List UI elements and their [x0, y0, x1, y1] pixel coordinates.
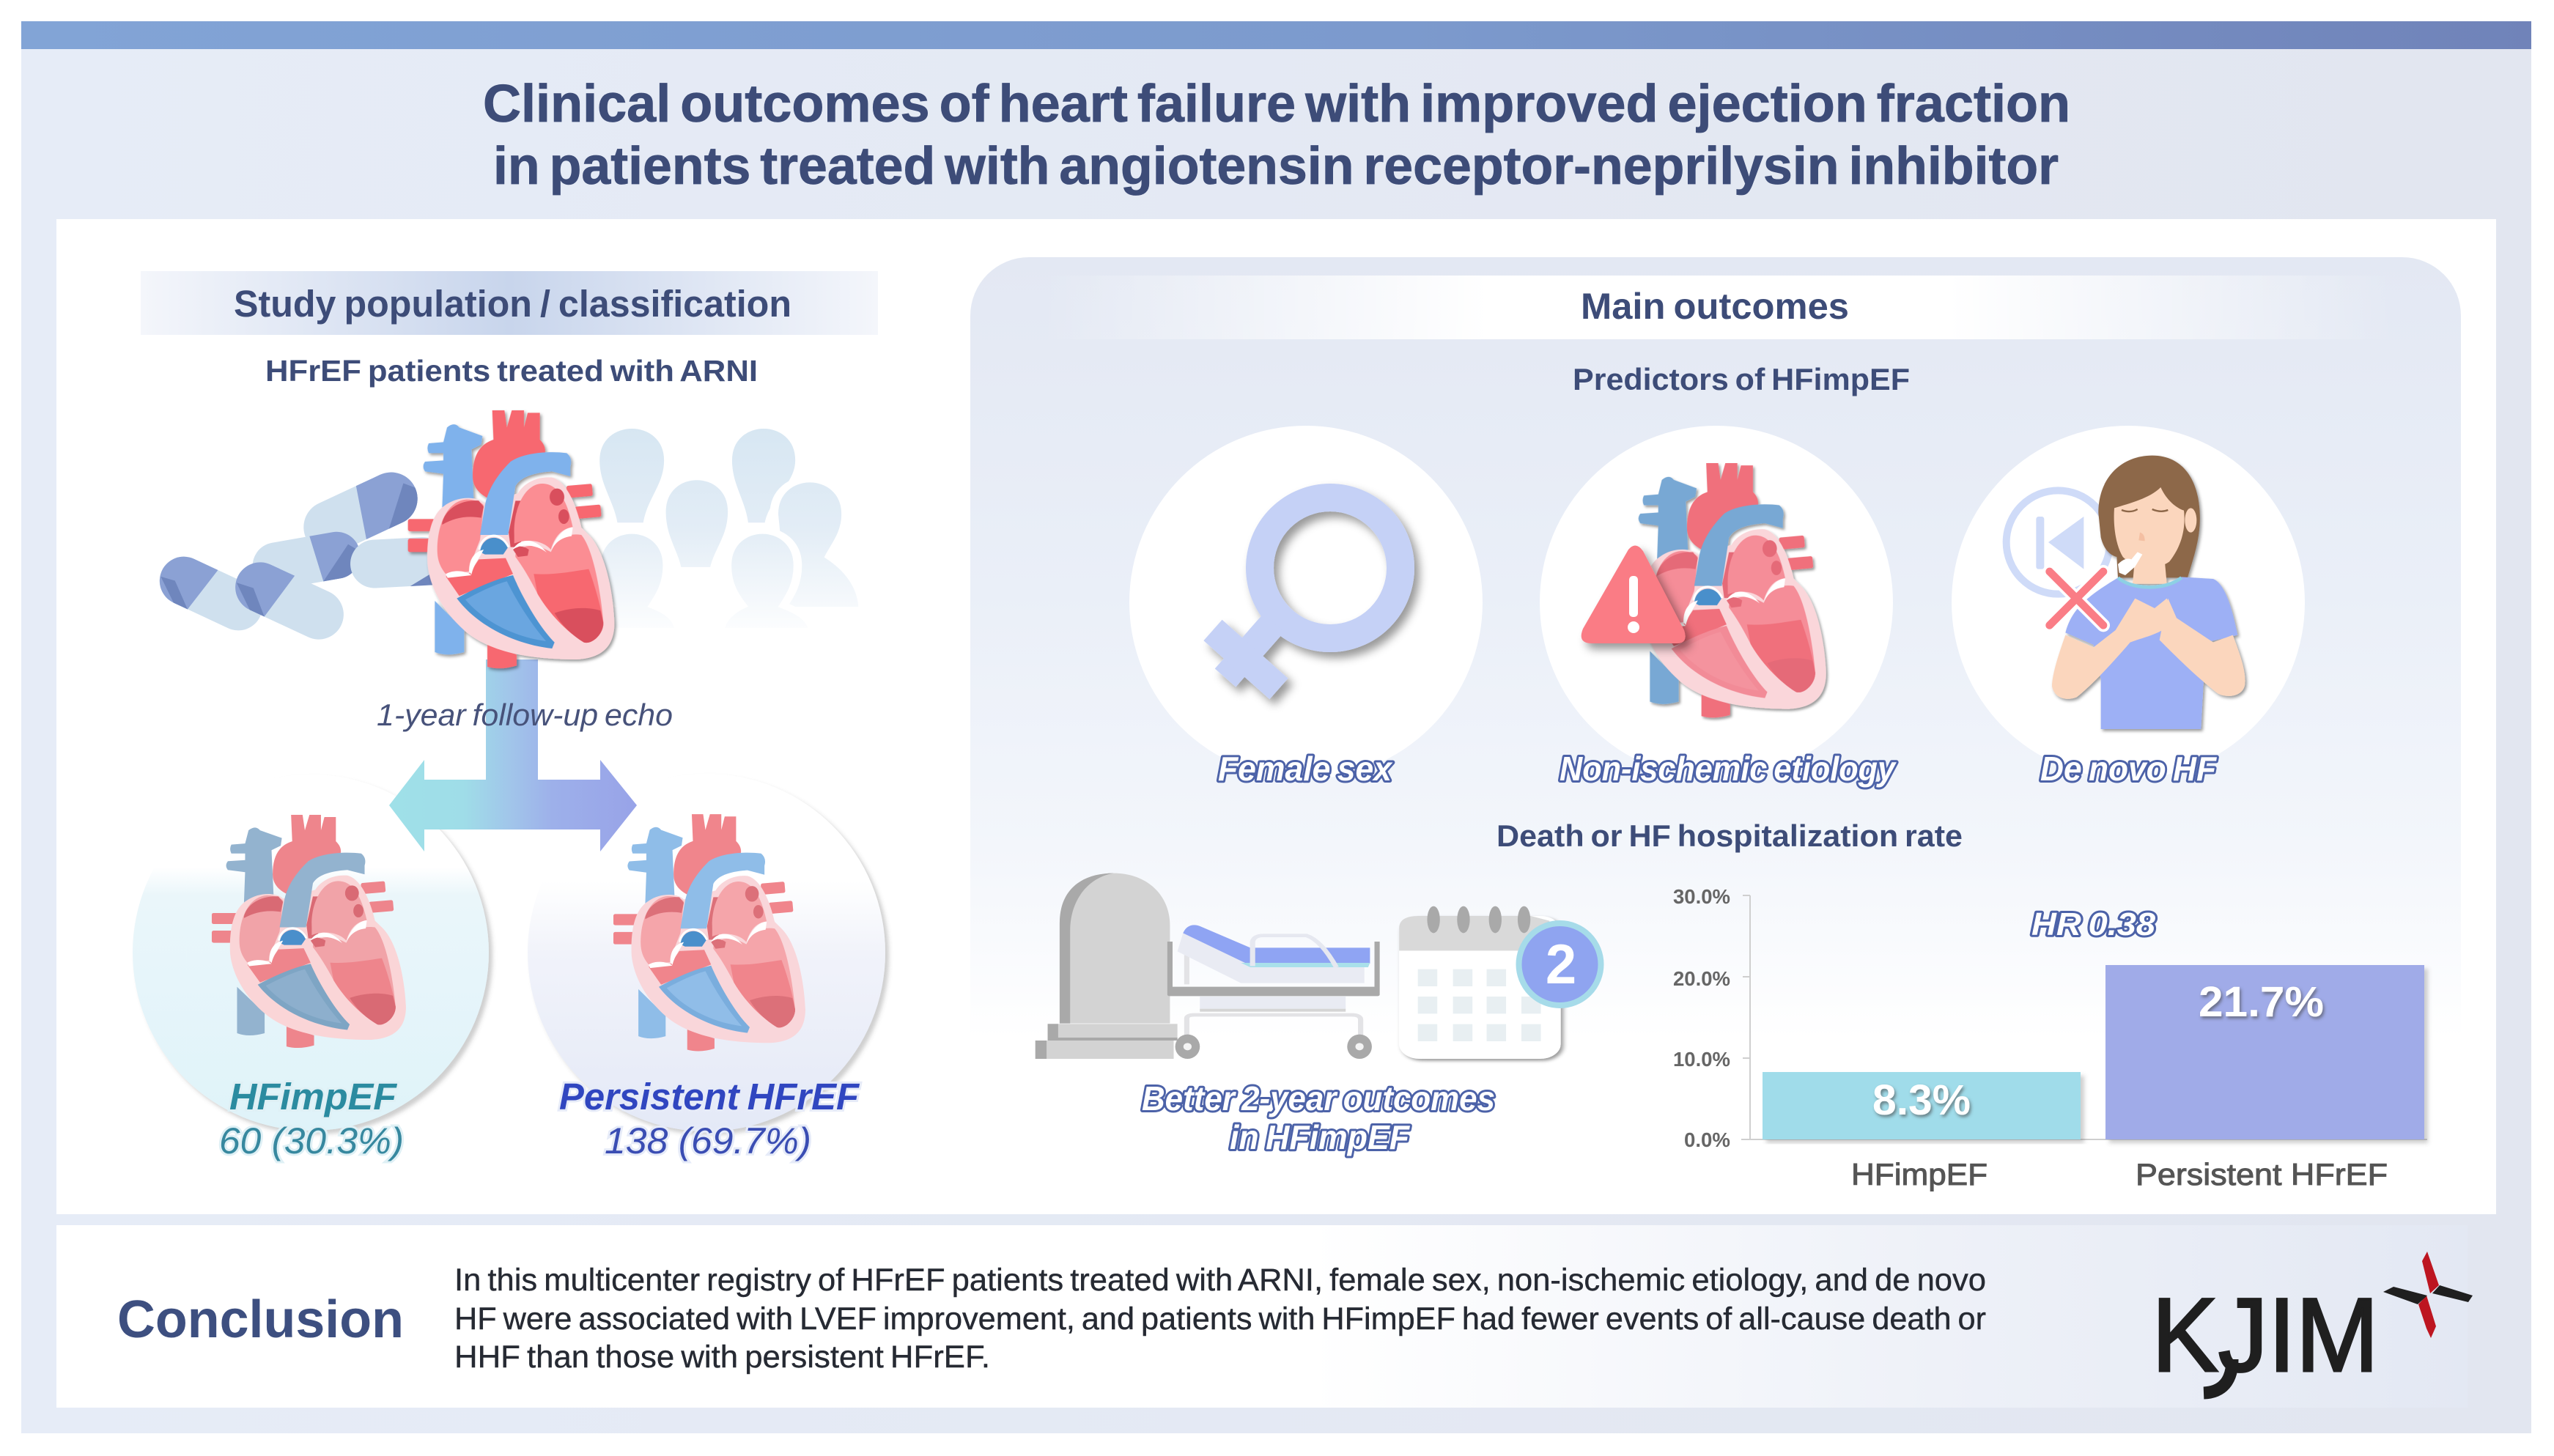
- top colour bar: [21, 21, 2531, 49]
- panel: main outcomes: [970, 257, 2461, 1210]
- logo: KJIM: KJIM: [2152, 1277, 2379, 1394]
- icon: rewind ring: [2007, 490, 2110, 594]
- icon: calendar: [1399, 906, 1601, 1059]
- icon: female symbol: [1213, 498, 1400, 689]
- label: hazard ratio: HR 0.38: [2031, 906, 2156, 942]
- logo: KJIM: [2152, 1252, 2473, 1394]
- category: HFimpEF: HFimpEF: [1851, 1157, 1988, 1191]
- icon: heart non-ischemic: [1623, 463, 1826, 717]
- label: Persistent HFrEF: Persistent HFrEF: [559, 1076, 860, 1117]
- axis tick labels: [1673, 885, 1730, 1151]
- icon: warning triangle: [1582, 545, 1686, 643]
- heading: Main outcomes: [1581, 286, 1849, 327]
- section heading band: [141, 271, 878, 335]
- icon: people silhouettes: [583, 426, 863, 631]
- conclusion text: In this multicenter registry of HFrEF patients treated with ARNI, female sex, non-ischemic etiology, and de novo: [454, 1263, 1986, 1298]
- bar: Persistent HFrEF: [2105, 965, 2424, 1139]
- label: follow-up: 1-year follow-up echo: [377, 698, 673, 732]
- panel: study population / classification: [133, 271, 885, 1161]
- title: [483, 75, 2070, 196]
- panel: conclusion: [56, 1225, 2473, 1408]
- icon: tombstone: [1036, 873, 1178, 1059]
- value: 8.3%: 8.3%: [1872, 1076, 1971, 1124]
- subheading: death or HF hospitalization: Death or HF hospitalization rate: [1496, 818, 1963, 853]
- icon: hospital bed: [1167, 925, 1380, 1059]
- conclusion text: HHF than those with persistent HFrEF.: [454, 1339, 990, 1375]
- label: HFimpEF: [219, 1076, 404, 1161]
- subheading: predictors: Predictors of HFimpEF: [1573, 362, 1910, 396]
- conclusion background: [56, 1225, 2468, 1408]
- axis: [1741, 895, 2427, 1139]
- icon: red cross: [2050, 572, 2103, 625]
- capsule: middle pill: [249, 528, 363, 593]
- icon: heart Persistent HFrEF: [613, 814, 805, 1051]
- label: de novo HF: De novo HF: [2040, 750, 2218, 788]
- arrow: split into two groups: [389, 659, 637, 851]
- label: female sex: Female sex: [1218, 750, 1393, 788]
- label: Persistent HFrEF: [559, 1076, 860, 1161]
- capsule: far pill: [295, 464, 427, 562]
- main white panel: [56, 219, 2496, 1214]
- label: non-ischemic etiology: Non-ischemic etiology: [1560, 750, 1897, 788]
- group circle: Persistent HFrEF: [528, 774, 885, 1131]
- label: Persistent HFrEF: 138 (69.7%): [605, 1120, 811, 1161]
- bar: HFimpEF: [1763, 1072, 2081, 1139]
- icon: heart HFimpEF: [212, 815, 406, 1048]
- predictor circle: female: [1129, 426, 1483, 779]
- axis tick labels: 30.0%: [1673, 885, 1730, 908]
- capsule: lower left pill: [152, 549, 270, 638]
- conclusion text: [454, 1263, 1986, 1375]
- group circle: HFimpEF: [133, 775, 489, 1131]
- capsule: right pill: [349, 536, 449, 589]
- heading band: [1041, 276, 2396, 339]
- title: Clinical outcomes of heart failure with improved ejection fraction: [483, 75, 2070, 133]
- label: better outcomes: [1142, 1079, 1495, 1156]
- woman figure: [2052, 456, 2245, 729]
- axis tick labels: 20.0%: [1673, 967, 1730, 990]
- predictor circle: non-ischemic: [1540, 426, 1893, 779]
- label: better outcomes: Better 2-year outcomes: [1142, 1079, 1495, 1117]
- label: better outcomes: in HFimpEF: [1230, 1118, 1411, 1156]
- badge: 2 years: 2: [1546, 934, 1576, 996]
- conclusion text: HF were associated with LVEF improvement, and patients with HFimpEF had fewer events of all-cause death or: [454, 1301, 1986, 1337]
- title: in patients treated with angiotensin receptor-neprilysin inhibitor: [493, 137, 2059, 196]
- icon: woman with chest discomfort: [2007, 456, 2245, 729]
- bar chart: death or HF hospitalization: [1673, 885, 2427, 1191]
- section heading: Study population / classification: [234, 283, 791, 325]
- label: HFimpEF: HFimpEF: [229, 1076, 398, 1117]
- capsule: lower right pill: [227, 554, 352, 648]
- category: Persistent HFrEF: Persistent HFrEF: [2136, 1157, 2388, 1191]
- icon: heart (treated patients): [408, 410, 614, 668]
- subheading: HFrEF patients treated with ARNI: [265, 354, 758, 388]
- predictor circle: de novo: [1952, 426, 2305, 779]
- panel background: [970, 257, 2461, 1210]
- value: 21.7%: 21.7%: [2199, 978, 2324, 1026]
- badge: 2 years: [1518, 923, 1601, 1005]
- axis tick labels: 10.0%: [1673, 1048, 1730, 1071]
- conclusion heading: Conclusion: [117, 1290, 404, 1349]
- axis tick labels: 0.0%: [1684, 1128, 1730, 1151]
- label: HFimpEF: 60 (30.3%): [219, 1120, 404, 1161]
